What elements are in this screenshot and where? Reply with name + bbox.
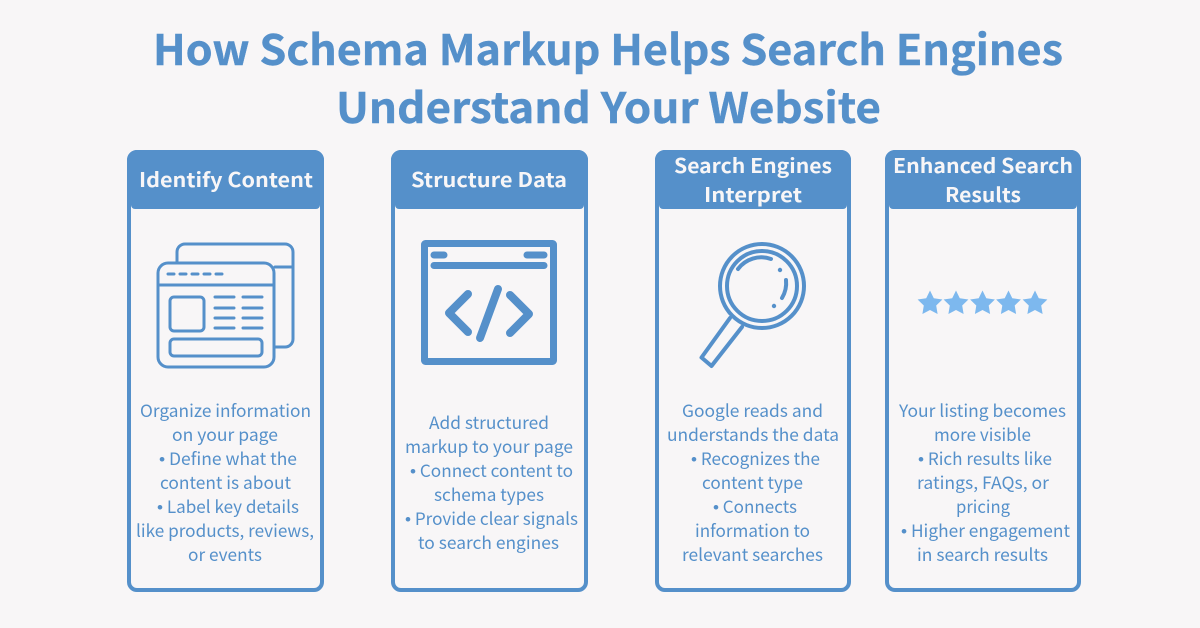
panel: enhanced search results <box>885 150 1081 590</box>
body text: structure data <box>405 409 578 554</box>
header: structure data: Structure Data <box>411 164 567 193</box>
body text: enhanced search results: in search results <box>917 541 1048 566</box>
body text: search engines interpret: Google reads and <box>682 397 823 422</box>
header: enhanced search results: Results <box>945 179 1021 208</box>
icon: five stars <box>918 290 1047 314</box>
body text: structure data: Add structured <box>429 409 549 434</box>
card frame <box>393 152 586 590</box>
header: enhanced search results: Enhanced Search <box>893 150 1073 179</box>
panel: search engines interpret <box>655 150 851 590</box>
header: search engines interpret <box>655 150 851 209</box>
title: How Schema Markup Helps Search Engines <box>153 17 1063 78</box>
title: Understand Your Website <box>336 75 881 136</box>
body text: search engines interpret: • Connects <box>713 493 797 518</box>
card frame <box>657 152 849 590</box>
body text: search engines interpret: relevant searches <box>682 541 823 566</box>
header: identify content <box>127 150 324 209</box>
body text: identify content: Organize information <box>140 397 311 422</box>
body text: identify content: on your page <box>172 421 278 446</box>
header: structure data <box>391 150 588 209</box>
body text: identify content: • Define what the <box>159 445 297 470</box>
icon: web page windows <box>158 244 293 367</box>
body text: search engines interpret <box>667 397 839 566</box>
body text: structure data: • Connect content to <box>410 457 573 482</box>
body text: search engines interpret: information to <box>695 517 810 542</box>
body text: enhanced search results: ratings, FAQs, or <box>917 469 1049 494</box>
header: search engines interpret: Interpret <box>704 179 803 208</box>
body text: structure data: • Provide clear signals <box>405 505 578 530</box>
header: search engines interpret: Search Engines <box>674 150 832 179</box>
body text: identify content: or events <box>188 541 262 566</box>
body text: enhanced search results: • Higher engagement <box>901 517 1071 542</box>
body text: search engines interpret: • Recognizes the <box>691 445 820 470</box>
icon: magnifying glass <box>702 244 804 366</box>
panel: identify content <box>127 150 324 590</box>
header: identify content: Identify Content <box>139 164 314 193</box>
card frame <box>887 152 1079 590</box>
body text: structure data: markup to your page <box>405 433 573 458</box>
body text: identify content: like products, reviews, <box>136 517 314 542</box>
body text: enhanced search results <box>898 397 1071 566</box>
body text: structure data: schema types <box>434 481 544 506</box>
body text: identify content: content is about <box>160 469 292 494</box>
icon: code window <box>424 244 554 362</box>
body text: enhanced search results: Your listing becomes <box>898 397 1066 422</box>
body text: search engines interpret: understands the data <box>667 421 839 446</box>
title <box>153 17 1063 136</box>
body text: enhanced search results: pricing <box>956 493 1010 518</box>
panel: structure data <box>391 150 588 590</box>
body text: search engines interpret: content type <box>702 469 803 494</box>
header: enhanced search results <box>885 150 1081 209</box>
body text: identify content: • Label key details <box>157 493 299 518</box>
body text: identify content <box>136 397 314 566</box>
body text: enhanced search results: • Rich results like <box>918 445 1052 470</box>
body text: structure data: to search engines <box>418 529 559 554</box>
body text: enhanced search results: more visible <box>934 421 1031 446</box>
card frame <box>129 152 322 590</box>
